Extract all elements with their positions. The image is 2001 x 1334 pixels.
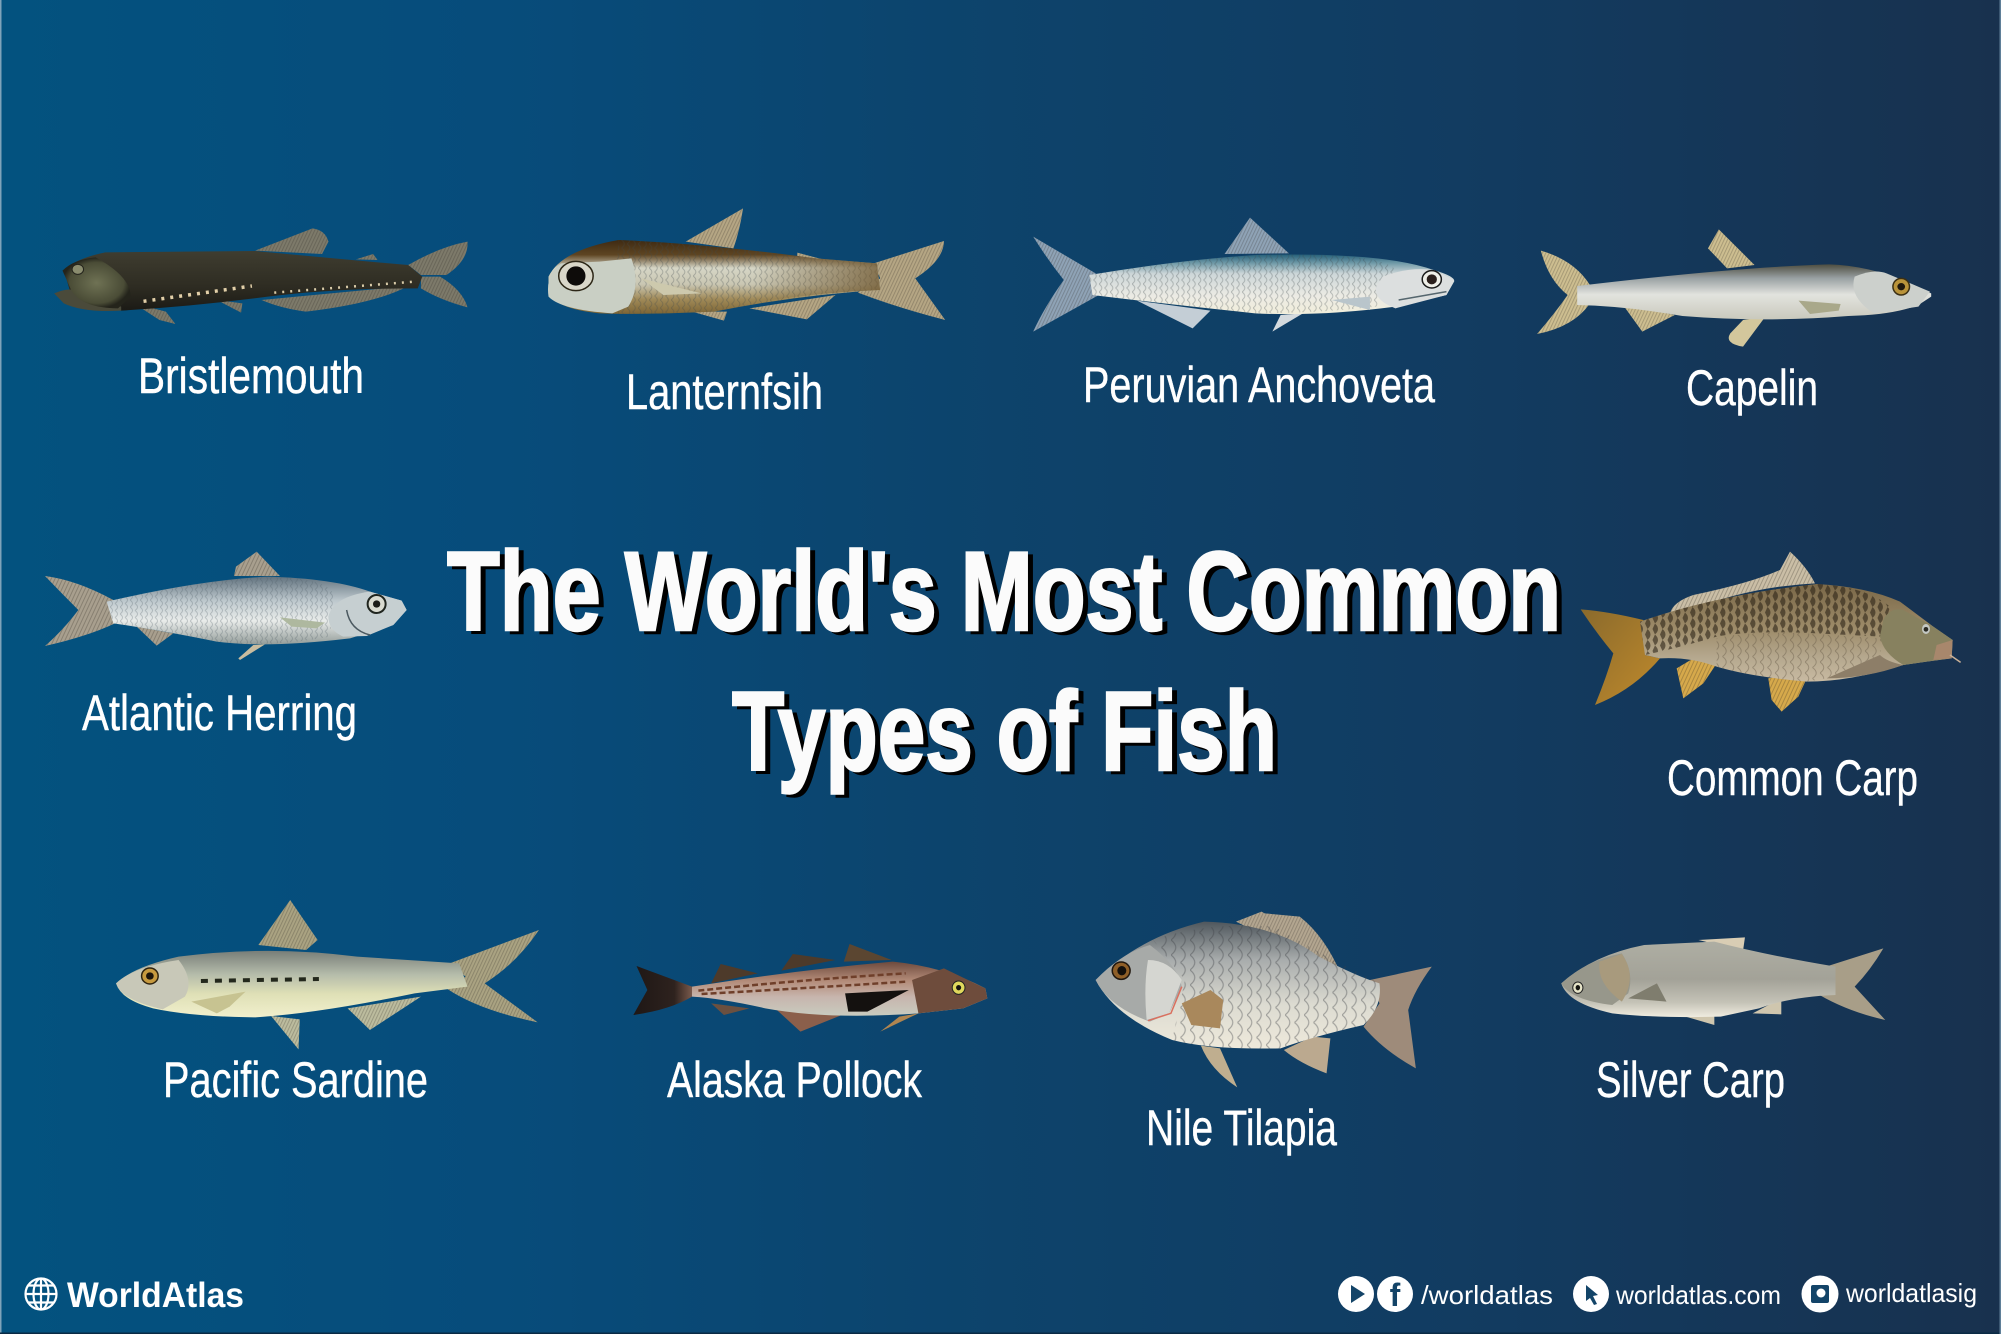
fish: common carp bbox=[1581, 552, 1961, 712]
label: Silver Carp: Silver Carp bbox=[1596, 1052, 1785, 1108]
title bbox=[447, 529, 1566, 797]
fish: bristlemouth bbox=[54, 228, 468, 324]
brand name: WorldAtlas bbox=[67, 1276, 244, 1315]
title: Types of Fish bbox=[732, 669, 1277, 794]
icon: play bbox=[1338, 1276, 1374, 1312]
label: Pacific Sardine: Pacific Sardine bbox=[163, 1052, 428, 1108]
label: Common Carp: Common Carp bbox=[1667, 750, 1918, 806]
fish: lanternfish bbox=[548, 208, 945, 321]
label: Atlantic Herring: Atlantic Herring bbox=[82, 685, 357, 741]
fish: atlantic herring bbox=[45, 552, 407, 660]
fish: alaska pollock bbox=[633, 944, 987, 1032]
footer: social links bbox=[1338, 1276, 1977, 1313]
icon: globe bbox=[26, 1278, 56, 1310]
fish: silver carp bbox=[1561, 937, 1885, 1025]
fish: peruvian anchoveta bbox=[1033, 218, 1454, 332]
fish: pacific sardine bbox=[116, 900, 539, 1049]
handle: worldatlasig: worldatlasig bbox=[1845, 1278, 1977, 1308]
icon: facebook bbox=[1377, 1276, 1413, 1313]
label: Nile Tilapia: Nile Tilapia bbox=[1146, 1100, 1337, 1156]
title: The World's Most Common bbox=[452, 532, 1566, 657]
fish: nile tilapia bbox=[1096, 912, 1432, 1087]
icon: cursor bbox=[1573, 1276, 1609, 1312]
handle: /worldatlas: /worldatlas bbox=[1421, 1280, 1553, 1310]
fish: capelin bbox=[1537, 229, 1931, 347]
label: Capelin: Capelin bbox=[1686, 360, 1818, 416]
icon: instagram bbox=[1802, 1276, 1838, 1312]
label: Peruvian Anchoveta: Peruvian Anchoveta bbox=[1083, 357, 1435, 413]
footer logo: WorldAtlas bbox=[26, 1276, 244, 1315]
title: The World's Most Common bbox=[447, 529, 1561, 654]
label: Bristlemouth: Bristlemouth bbox=[138, 348, 364, 404]
icon: facebook: f bbox=[1390, 1277, 1401, 1313]
link: worldatlas.com: worldatlas.com bbox=[1615, 1280, 1781, 1310]
label: Lanternfsih: Lanternfsih bbox=[626, 364, 823, 420]
label: Alaska Pollock: Alaska Pollock bbox=[667, 1052, 923, 1108]
title: Types of Fish bbox=[737, 672, 1282, 797]
